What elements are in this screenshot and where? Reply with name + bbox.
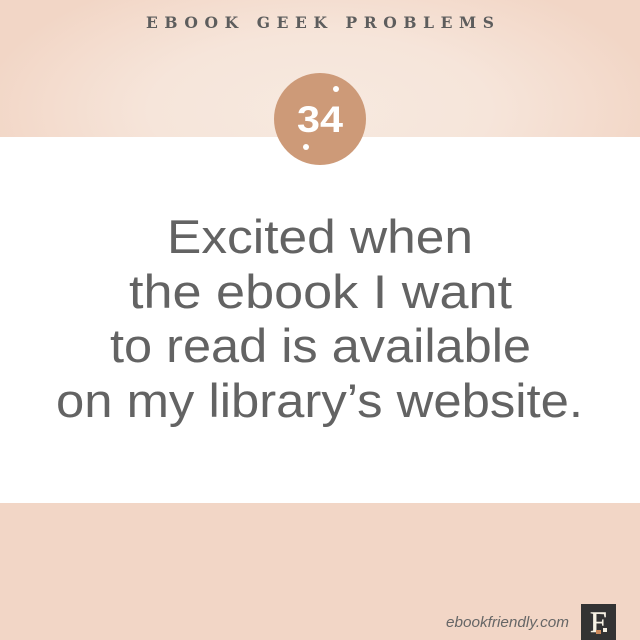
site url: ebookfriendly.com	[446, 614, 569, 631]
text block: main message: on my library’s website.	[56, 374, 583, 427]
badge: number 34	[274, 73, 366, 165]
text block: main message: the ebook I want	[129, 265, 512, 318]
badge dot bottom	[303, 144, 309, 150]
logo square	[596, 630, 601, 634]
badge dot top	[333, 86, 339, 92]
panel: top header band	[0, 0, 640, 137]
logo letter: F	[590, 606, 607, 639]
heading: ebook geek problems: EBOOK GEEK PROBLEMS	[146, 13, 494, 32]
text block: main message: to read is available	[110, 319, 531, 372]
panel: bottom band	[0, 503, 640, 640]
icon: ebook friendly logo	[581, 604, 616, 640]
number: 34	[297, 99, 343, 140]
text block: main message: Excited when	[167, 210, 473, 263]
logo dot	[603, 628, 607, 632]
text block: main message	[56, 210, 583, 427]
